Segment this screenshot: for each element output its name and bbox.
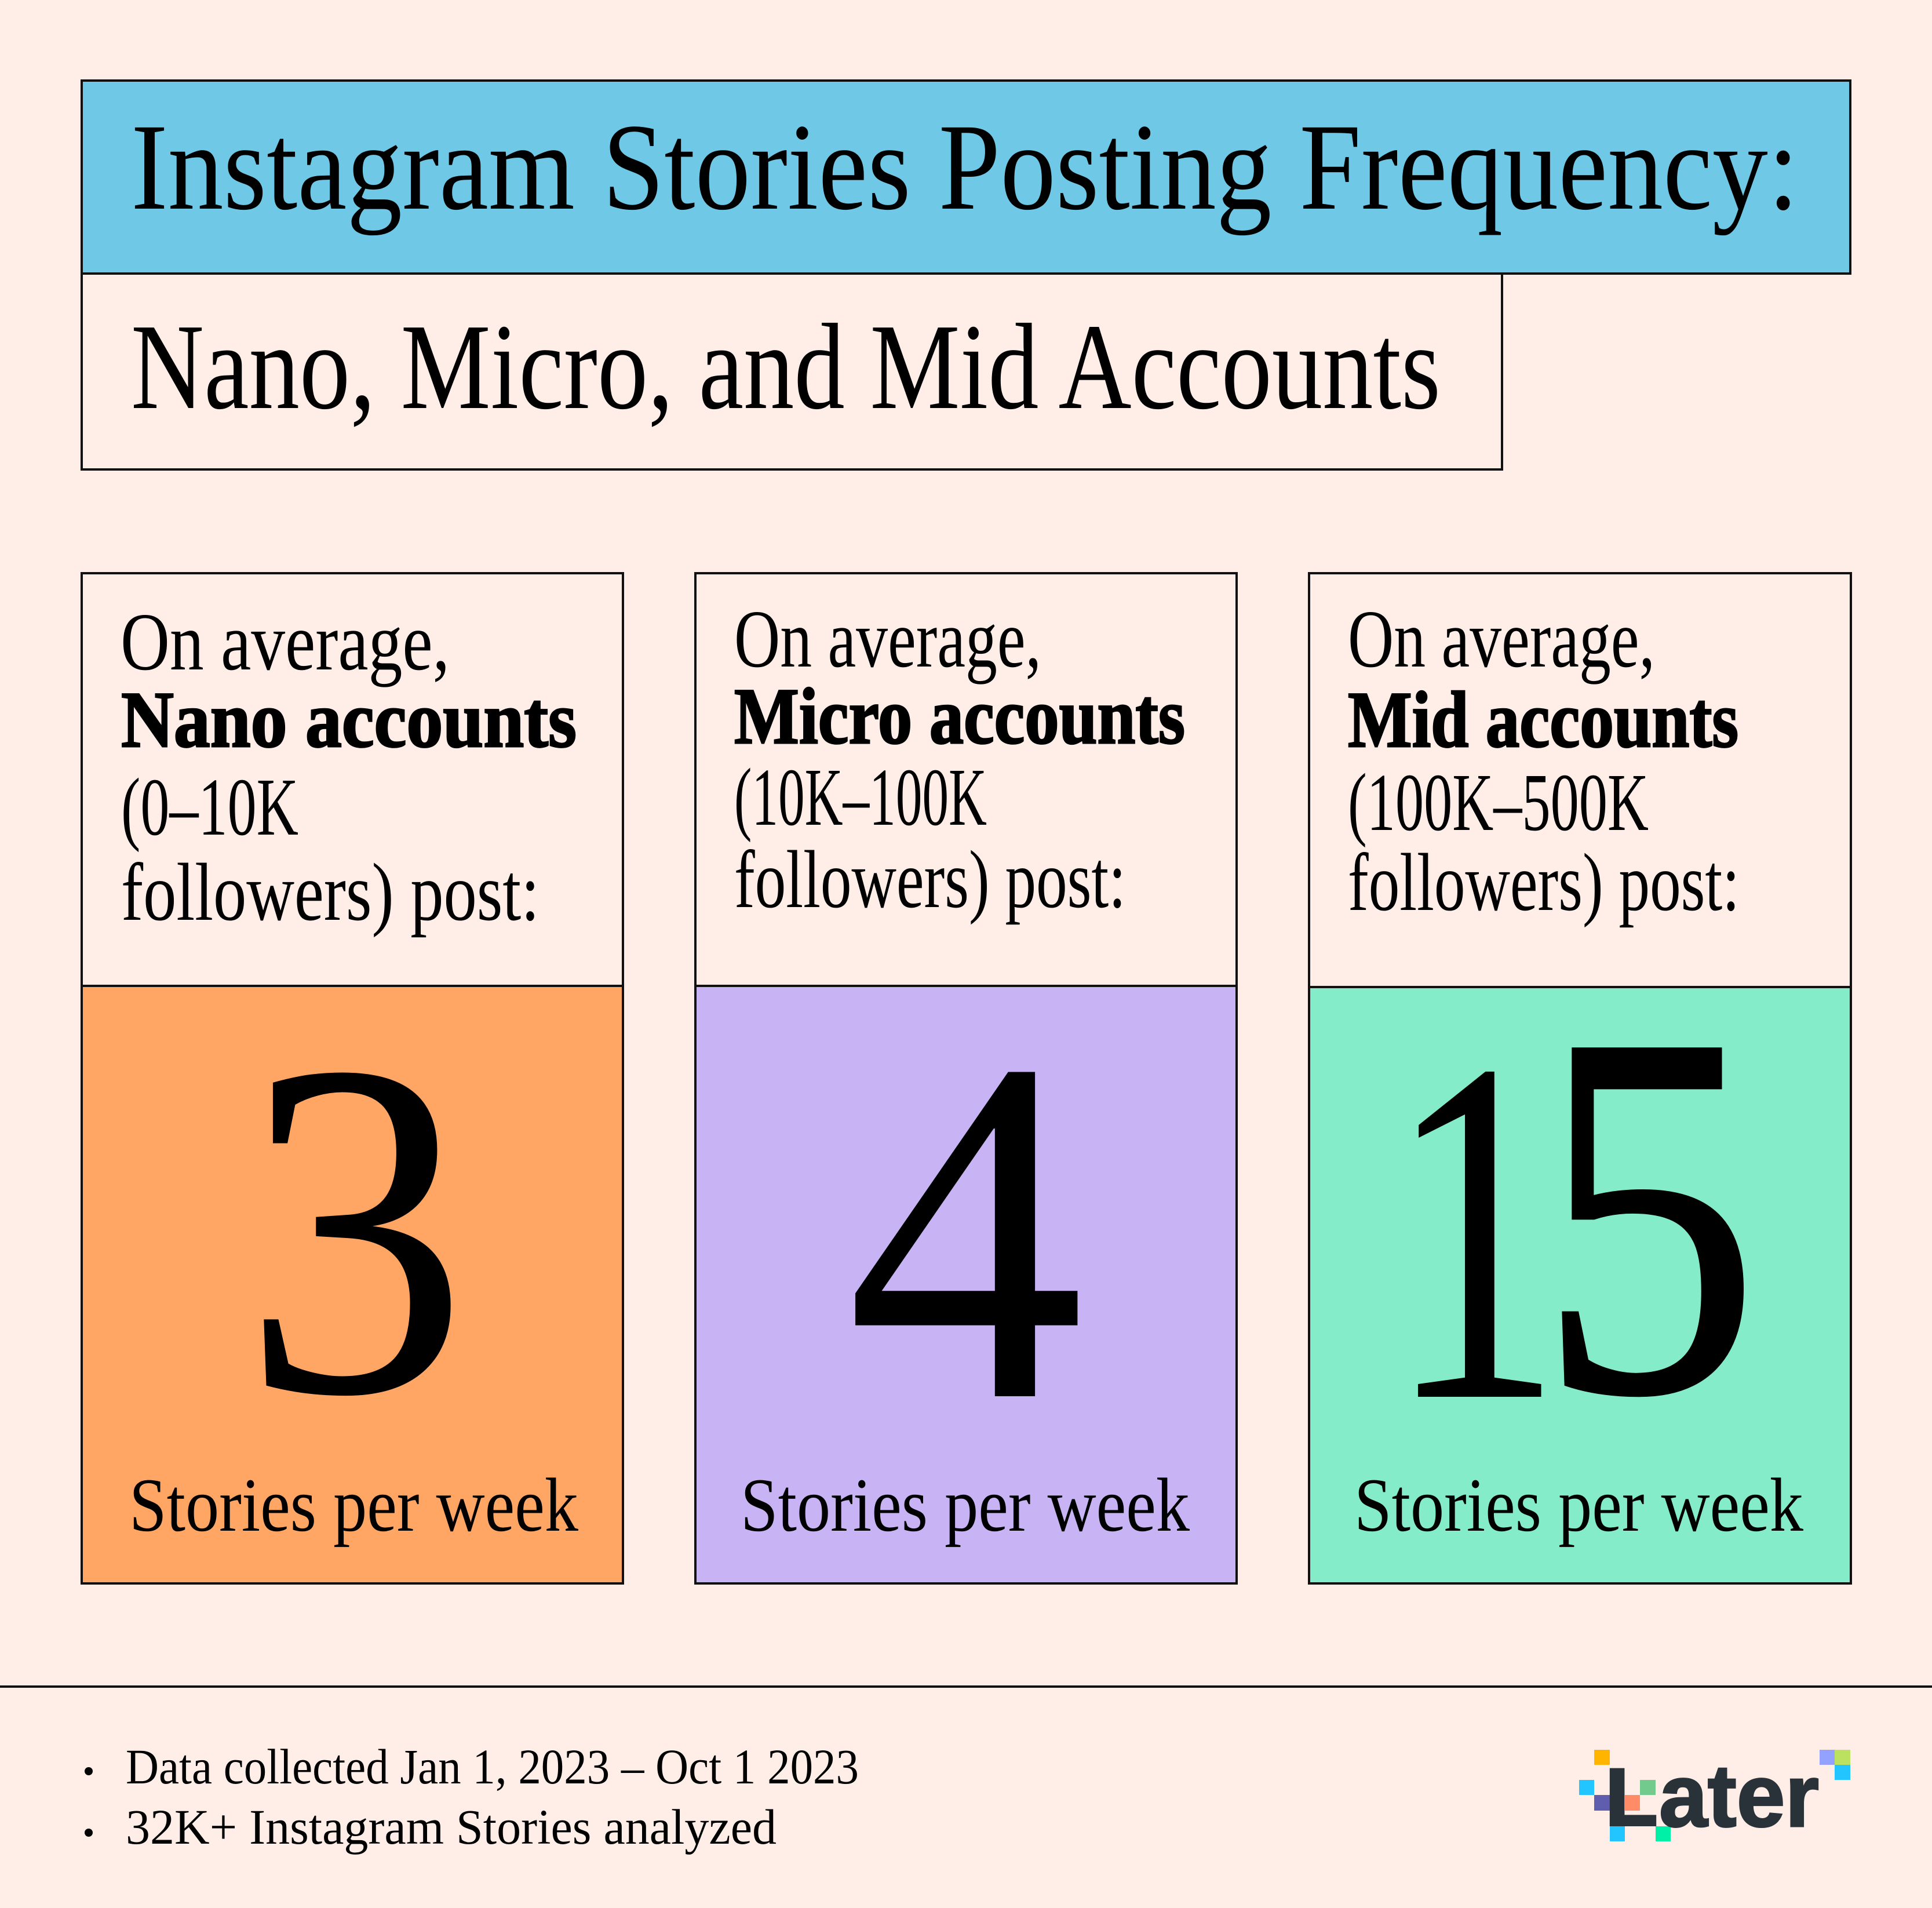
micro stat box (695, 986, 1237, 1583)
nano stat label: Stories per week (129, 1462, 578, 1547)
bullet 1 (85, 1767, 93, 1775)
mid stat number: 1 (1387, 959, 1562, 1504)
mid description text: followers) post: (1348, 836, 1740, 928)
mid stat box (1309, 987, 1851, 1583)
nano description text (121, 596, 577, 938)
title line 1 banner (82, 81, 1850, 274)
mid description text: (100K–500K (1348, 756, 1649, 848)
mid description box (1309, 573, 1851, 987)
mid description text: On average, (1348, 593, 1655, 684)
nano stat number: 3 (242, 963, 468, 1495)
micro stat number: 4 (846, 958, 1085, 1503)
mid description text: Mid accounts (1348, 675, 1738, 764)
logo: Later: ater (1659, 1746, 1819, 1845)
micro description text: (10K–100K (734, 751, 987, 843)
micro stat label: Stories per week (741, 1462, 1190, 1547)
bullet 2 (85, 1829, 93, 1837)
footnotes (85, 1739, 859, 1855)
panel: nano accounts (82, 573, 623, 1583)
nano description text: On average, (121, 596, 450, 687)
footnote: sample size: 32K+ Instagram Stories analyzed (126, 1799, 777, 1855)
nano description text: Nano accounts (121, 675, 577, 764)
logo: Later: L (1605, 1752, 1658, 1843)
micro description text: followers) post: (734, 833, 1126, 925)
mid stat number: 5 (1537, 926, 1760, 1503)
mid stat label: Stories per week (1354, 1462, 1803, 1547)
micro description text: On average, (734, 593, 1041, 684)
micro description text: Micro accounts (734, 672, 1185, 760)
panel: mid accounts (1309, 573, 1851, 1583)
title line 2: Nano, Micro, and Mid Accounts (131, 298, 1441, 435)
mid description text (1348, 593, 1740, 928)
logo: Later (1579, 1746, 1850, 1845)
footnote: data collection dates: Data collected Jan 1, 2023 – Oct 1 2023 (126, 1739, 859, 1794)
nano stat box (82, 986, 623, 1583)
nano description text: followers) post: (121, 846, 539, 938)
title block (82, 81, 1850, 469)
mid stat number (1387, 926, 1760, 1503)
nano description text: (0–10K (121, 761, 298, 853)
nano description box (82, 573, 623, 986)
panel: micro accounts (695, 573, 1237, 1583)
micro description text (734, 593, 1185, 925)
title line 2 box (82, 274, 1502, 469)
micro description box (695, 573, 1237, 986)
